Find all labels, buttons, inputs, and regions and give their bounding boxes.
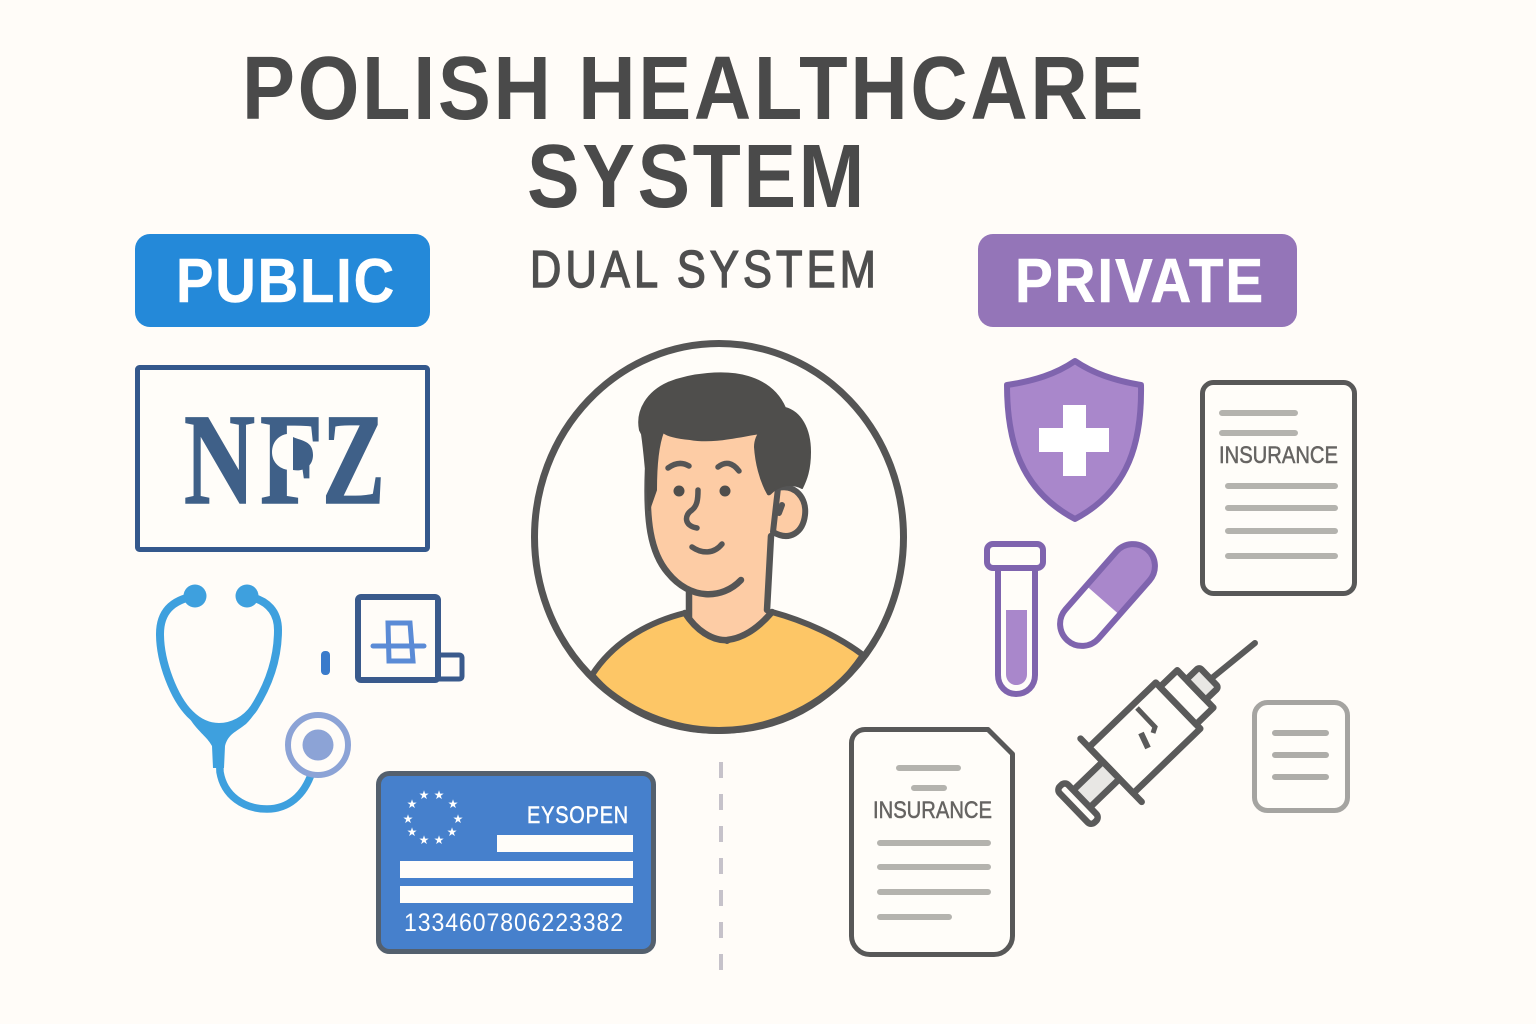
panel: NFZ logo: F — [260, 388, 323, 532]
EU stars: ★ — [453, 812, 463, 826]
hair — [639, 373, 810, 510]
barrel marks — [1137, 708, 1155, 748]
EU stars: ★ — [434, 788, 444, 802]
panel: NFZ logo — [138, 368, 428, 550]
private badge — [978, 234, 1297, 327]
EU stars: ★ — [419, 788, 429, 802]
title: POLISH HEALTHCARE — [242, 39, 1146, 139]
EU stars: ★ — [407, 825, 417, 839]
person portrait — [534, 343, 904, 731]
label: INSURANCE — [1219, 442, 1338, 469]
title — [242, 39, 1146, 227]
icon: capsule — [1051, 535, 1164, 655]
card heading: EYSOPEN — [527, 802, 629, 829]
needle — [1212, 643, 1255, 678]
icon: shield with cross — [1007, 361, 1141, 519]
EU stars: ★ — [407, 797, 417, 811]
EU stars: ★ — [448, 797, 458, 811]
icon: small blue medical square — [358, 597, 462, 680]
document lines — [1222, 413, 1335, 556]
barrel — [1089, 683, 1200, 793]
European health card — [378, 774, 654, 952]
icon: test tube — [987, 544, 1043, 694]
eyes — [674, 486, 684, 496]
EU stars — [403, 788, 463, 847]
icon: small dash mark — [321, 651, 330, 675]
dashed centre divider — [719, 762, 723, 970]
hub — [1186, 667, 1219, 700]
subtitle: dual system: DUAL SYSTEM — [530, 241, 880, 299]
panel: NFZ logo: N — [184, 388, 255, 532]
icon: syringe — [1042, 643, 1255, 839]
EU stars: ★ — [419, 833, 429, 847]
EU stars: ★ — [434, 833, 444, 847]
document: insurance right — [1202, 382, 1354, 594]
card bars — [400, 835, 633, 903]
portrait ring — [534, 344, 904, 730]
nozzle section — [1160, 670, 1213, 724]
public badge: PUBLIC — [176, 247, 396, 316]
document lines — [880, 768, 988, 917]
document: small grey note — [1254, 702, 1348, 810]
plunger rod — [1072, 762, 1119, 809]
title: SYSTEM — [527, 127, 867, 227]
public badge — [135, 234, 430, 327]
card number: 1334607806223382 — [404, 909, 624, 937]
note lines — [1275, 733, 1326, 777]
icon: stethoscope — [160, 584, 348, 809]
facial features — [668, 463, 739, 552]
plunger cap — [1056, 781, 1100, 826]
shirt — [592, 612, 863, 731]
label: INSURANCE — [873, 797, 992, 824]
EU stars: ★ — [447, 825, 457, 839]
ear — [773, 487, 805, 536]
flange — [1081, 739, 1142, 802]
panel: NFZ logo: Z — [322, 388, 385, 532]
document: insurance bottom — [852, 730, 1012, 954]
EU stars: ★ — [403, 812, 413, 826]
private badge: PRIVATE — [1015, 247, 1265, 316]
neck and face — [648, 400, 780, 639]
